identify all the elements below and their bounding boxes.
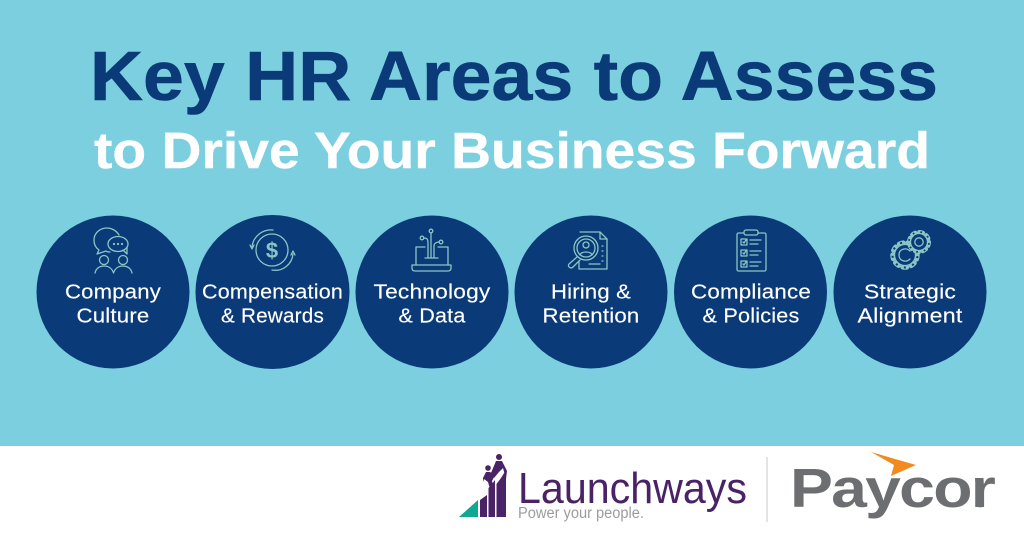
label line 2: Retention	[542, 304, 640, 328]
panel: compliance and policies	[674, 216, 827, 368]
panel: technology and data	[356, 216, 508, 368]
subtitle: to Drive Your Business Forward	[94, 122, 930, 179]
logo wordmark: Launchways	[518, 464, 747, 513]
logo: Launchways	[459, 454, 747, 522]
title: Key HR Areas to Assess	[90, 37, 938, 115]
label: Compliance	[691, 280, 811, 304]
label: Strategic	[864, 280, 956, 304]
icon: gears	[892, 232, 929, 268]
panel: hiring and retention	[514, 216, 668, 368]
icon glyph: dollar: $	[266, 238, 278, 263]
panel: strategic alignment	[834, 216, 986, 368]
label line 2: Culture	[76, 304, 150, 328]
icon: document with magnifier	[568, 232, 607, 269]
logo: Paycor	[790, 452, 995, 519]
registered mark: ®	[978, 503, 983, 510]
logo tagline: Power your people.	[518, 505, 644, 522]
icon: people with speech bubbles	[94, 228, 132, 273]
label line 2: & Rewards	[221, 304, 324, 328]
panel: company culture	[36, 216, 190, 368]
divider	[766, 457, 768, 522]
label: Company	[65, 280, 162, 304]
label line 2: Alignment	[858, 304, 963, 328]
logo arrow	[871, 452, 916, 476]
label: Technology	[374, 280, 491, 304]
label line 2: & Policies	[702, 304, 800, 328]
icon: dollar with arrows	[250, 230, 295, 270]
logo wordmark: Paycor	[790, 457, 995, 519]
label: Compensation	[202, 280, 343, 304]
panel: compensation and rewards	[196, 215, 350, 369]
label line 2: & Data	[398, 304, 466, 328]
label: Hiring &	[551, 280, 631, 304]
logo mark: bars and climbers	[480, 454, 507, 517]
logo mark: triangle	[459, 500, 478, 517]
icon: clipboard checklist	[737, 230, 766, 271]
footer panel	[0, 446, 1024, 536]
icon: laptop with circuit	[412, 229, 451, 271]
